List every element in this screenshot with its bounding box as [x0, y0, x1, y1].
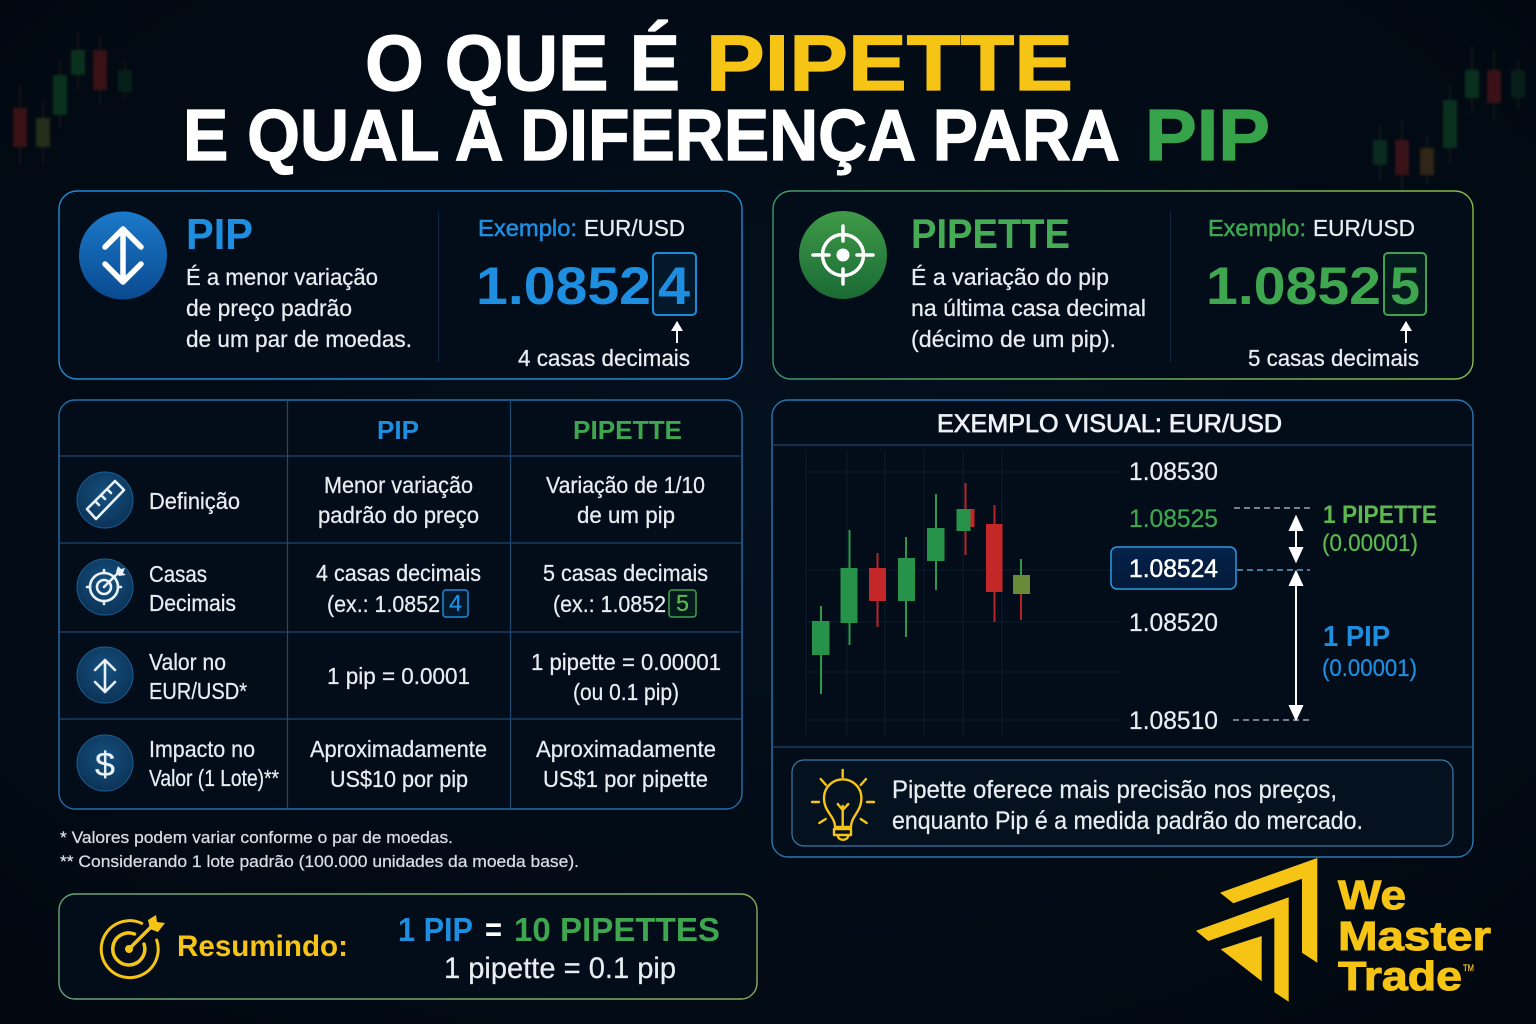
price scale: 1.08530 [1129, 458, 1218, 486]
callout text: Pipette oferece mais precisão nos preços, [892, 776, 1337, 804]
row: definicao: Variação de 1/10 [546, 472, 705, 498]
row: casas decimais: (ex.: 1.0852 [553, 591, 666, 617]
label: 1 pip: 1 PIP [1323, 621, 1390, 653]
pipette definition: (décimo de um pip). [911, 326, 1116, 352]
summary formula [398, 911, 720, 985]
label: 1 pip [1322, 621, 1417, 682]
row: casas decimais: 5 [676, 590, 689, 616]
summary formula: 1 pipette = 0.1 pip [444, 952, 676, 985]
table header: PIP [377, 415, 419, 445]
row: impacto: US$1 por pipette [543, 766, 708, 792]
pipette example: Exemplo: [1208, 215, 1306, 241]
row: impacto: Impacto no [149, 736, 255, 762]
icon: target [77, 559, 133, 615]
row: definicao: Definição [149, 488, 240, 514]
icon: yellow target [101, 915, 165, 978]
callout text [892, 776, 1363, 835]
pip definition: É a menor variação [186, 264, 378, 290]
dashed levels [1233, 508, 1310, 720]
row: casas decimais [77, 559, 708, 617]
icon: dollar: $ [95, 746, 115, 784]
row: casas decimais: Casas [149, 561, 207, 587]
arrow: 1 pip [1290, 572, 1302, 719]
logo wordmark: Trade [1338, 953, 1462, 999]
pipette example: 1.0852 [1206, 257, 1381, 316]
price scale: 1.08525 [1129, 505, 1218, 533]
resumindo label: Resumindo: [177, 930, 348, 963]
row: impacto: Aproximadamente [310, 736, 487, 762]
pipette example: EUR/USD [1313, 215, 1415, 241]
row: casas decimais: Decimais [149, 590, 236, 616]
table header: PIPETTE [573, 415, 682, 445]
row: casas decimais: (ex.: 1.0852 [327, 591, 440, 617]
row: valor: EUR/USD* [149, 678, 247, 704]
title: PIPETTE [706, 18, 1073, 107]
pipette definition: É a variação do pip [911, 264, 1109, 290]
logo wordmark: We [1338, 872, 1406, 918]
pipette definition: na última casa decimal [911, 295, 1146, 321]
logo wordmark: Master [1338, 913, 1491, 959]
pip example: 4 [658, 257, 691, 316]
row: impacto: Valor (1 Lote)** [149, 765, 279, 791]
price scale: 1.08524 [1129, 555, 1218, 583]
pip definition: de preço padrão [186, 295, 352, 321]
callout [792, 760, 1453, 846]
row: definicao: Menor variação [324, 472, 473, 498]
title [183, 18, 1270, 176]
pip example [476, 215, 696, 371]
icon: pip arrows [79, 212, 167, 300]
background candles right [1373, 45, 1525, 190]
row: definicao [77, 472, 705, 528]
row: casas decimais: 5 casas decimais [543, 560, 708, 586]
row: valor: 1 pipette = 0.00001 [531, 649, 721, 675]
panel: PIPETTE [773, 191, 1473, 379]
price scale [1111, 458, 1236, 735]
pipette definition [911, 264, 1146, 352]
logo mark [1196, 858, 1317, 1002]
pip definition: de um par de moedas. [186, 326, 412, 352]
icon: pipette target [799, 211, 887, 299]
comparison table [59, 400, 742, 809]
heading: PIP: PIP [186, 210, 253, 259]
price scale: 1.08520 [1129, 609, 1218, 637]
label: 1 pip: (0.00001) [1322, 655, 1417, 682]
icon: light bulb [812, 770, 874, 840]
row: valor: (ou 0.1 pip) [573, 679, 679, 705]
logo wordmark: TM [1463, 963, 1474, 973]
heading: PIPETTE: PIPETTE [911, 210, 1070, 257]
icon: dollar [77, 735, 133, 791]
table header [377, 415, 682, 445]
title: O QUE É [365, 18, 680, 107]
summary formula: 1 PIP [398, 911, 473, 948]
price scale: 1.08510 [1129, 707, 1218, 735]
summary formula: = [485, 911, 502, 948]
background candles left [13, 30, 132, 165]
label: 1 pipette [1322, 501, 1437, 557]
pip example: Exemplo: [478, 215, 577, 241]
label: 1 pipette: (0.00001) [1322, 530, 1418, 557]
title: PIP [1145, 96, 1270, 176]
row: valor [77, 647, 721, 705]
panel: resumindo [59, 894, 757, 999]
row: definicao: de um pip [577, 502, 675, 528]
pipette example: 5 casas decimais [1248, 345, 1419, 371]
row: valor: 1 pip = 0.0001 [327, 663, 470, 689]
row: casas decimais: 4 casas decimais [316, 560, 481, 586]
arrow: 1 pipette [1290, 517, 1302, 561]
label: 1 pipette: 1 PIPETTE [1323, 501, 1437, 529]
logo: We Master Trade [1196, 858, 1491, 1002]
pip definition [186, 264, 412, 352]
pipette example [1206, 215, 1426, 371]
pipette example: 5 [1390, 257, 1420, 316]
candlestick chart [805, 450, 1120, 735]
footnotes: * Valores podem variar conforme o par de moedas. [60, 828, 453, 847]
row: definicao: padrão do preço [318, 502, 479, 528]
panel: exemplo visual [772, 400, 1473, 857]
callout text: enquanto Pip é a medida padrão do mercado. [892, 807, 1363, 835]
row: impacto [77, 735, 716, 792]
icon: up down arrows [77, 647, 133, 703]
pip example: 4 casas decimais [518, 345, 690, 371]
footnotes [60, 828, 579, 871]
heading: exemplo visual: EXEMPLO VISUAL: EUR/USD [937, 410, 1282, 438]
footnotes: ** Considerando 1 lote padrão (100.000 unidades da moeda base). [60, 852, 579, 871]
row: impacto: US$10 por pip [330, 766, 468, 792]
row: casas decimais: 4 [449, 590, 462, 616]
icon: ruler [77, 472, 133, 528]
row: valor: Valor no [149, 649, 226, 675]
pip example: 1.0852 [476, 257, 651, 316]
pip example: EUR/USD [584, 215, 685, 241]
title: E QUAL A DIFERENÇA PARA [183, 96, 1120, 176]
row: impacto: Aproximadamente [536, 736, 716, 762]
logo wordmark [1338, 872, 1491, 999]
panel: PIP [59, 191, 742, 379]
summary formula: 10 PIPETTES [514, 911, 720, 948]
